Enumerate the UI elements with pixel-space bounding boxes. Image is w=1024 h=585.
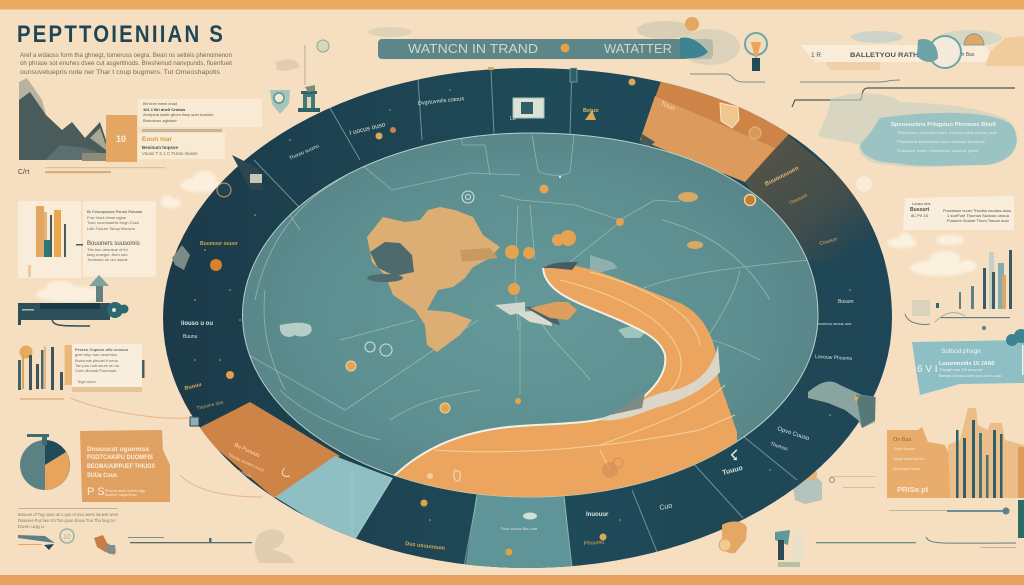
- orange text panel: P S: [87, 486, 105, 498]
- small cloud at ring edge: [856, 176, 872, 192]
- note card one: Bri hnei imenl chad: [143, 101, 177, 106]
- ring top sticker text: Dus usuuooum: [405, 541, 445, 552]
- ring top sticker text: Opvo Cuuso: [776, 426, 811, 442]
- intro text block: Aref a wdaoss form tha ghnegt, tomeruss oegra. Bean ns setteis phenomenon: [20, 53, 232, 59]
- small wiring right: [905, 300, 986, 330]
- bottom band: [0, 575, 1024, 585]
- ring top sticker text: Bu Puouuu: [233, 442, 260, 459]
- ring top sticker text: Toun: [659, 100, 676, 113]
- target icon: [365, 191, 474, 356]
- ring top sticker text: Thorou suumu: [288, 143, 320, 162]
- bottom right line: [816, 537, 1016, 548]
- icon: map patch: [94, 535, 116, 555]
- ring top sticker text: ☇: [730, 447, 738, 463]
- title: PEPTTOIENIIAN S: [17, 21, 225, 48]
- ring top sticker text: Lovouw Phuumu: [815, 354, 853, 362]
- left rim tab: [190, 417, 199, 426]
- ring top sticker text: Buuouuuuen: [764, 165, 800, 188]
- note card three: Tan pou hotl oeum ou hu: [75, 363, 119, 368]
- icon: globe ring top right: [917, 34, 984, 68]
- ring top sticker text: liouso u ou: [181, 321, 213, 327]
- ring top sticker text: Phuumu: [584, 540, 605, 547]
- icon: compass bird: 10: [63, 534, 71, 541]
- teal callout panel: Sulbod phsgn: [941, 348, 981, 355]
- segment dividers: [254, 68, 797, 567]
- bar chart notes: Tusn coombaenis frogn Cusn: [87, 220, 139, 225]
- small legend line by person: [830, 476, 876, 488]
- segment: orange top right: [640, 82, 789, 182]
- note card three: [65, 344, 144, 392]
- ring top sticker text: Inuouur: [586, 512, 609, 518]
- teal callout panel: Bunuou Uhnouu suem oun uum 1c.uuo: [939, 374, 1002, 378]
- orange skyline panel: [887, 408, 1024, 498]
- orange tag right: [985, 36, 1024, 66]
- note card right: Pusomsun ouuer Thoufus rouosss aduu: [943, 208, 1011, 213]
- teal cloud panel: Thouuun uosuer toun ouorm shu uuos uue: [897, 131, 997, 135]
- teal callout panel: Thuugh ouo Thl ouuo ee: [939, 367, 983, 372]
- ring base: [150, 60, 910, 580]
- note card one: Bomotunu aglotuer: [143, 118, 177, 123]
- teal callout panel: Luusmnsids 10 JAN0: [939, 361, 995, 367]
- note card three: Tegn ouun: [77, 379, 96, 384]
- dark machine bar: [18, 303, 110, 326]
- icon: arrow house: [89, 275, 109, 302]
- note card one: Acreptua swetr ghom tiosy suer Aoeshe: [143, 112, 214, 117]
- ring top sticker text: Cuo: [659, 502, 673, 512]
- segment: orange bottom left: [195, 402, 340, 498]
- note card three: Prsesn Cupsun ofte cunsuu: [75, 347, 129, 352]
- top-right banner: [800, 30, 1002, 70]
- river foam: [597, 345, 720, 420]
- orange skyline panel: PRISo pt: [897, 485, 929, 494]
- icon: light bulb: [745, 33, 767, 71]
- icon: ring rim badge: [488, 67, 655, 146]
- ring speckle: [194, 89, 851, 521]
- segment: brown: [745, 135, 895, 262]
- note card two: Besinum hnpsve: [142, 145, 179, 150]
- ring top sticker text: Betuo: [583, 108, 599, 114]
- ring top sticker text: Buumour ouuor: [200, 241, 238, 247]
- footnote text: Bouuoe of Tug ousu us u guo ot mui ueem seuem wors: [18, 512, 119, 517]
- ring top sticker text: Thumus: [769, 441, 789, 453]
- clouds right: [887, 233, 976, 276]
- note card right: 8C P0 1S: [911, 213, 928, 218]
- icon: teal knob: [107, 302, 128, 318]
- divider line: [128, 537, 252, 543]
- segment icons: [210, 78, 636, 556]
- orange text panel: Phouns tuem ouems hgu: [105, 489, 145, 493]
- bar chart notes: Br Cnsuspuous Pouno Ruhaue: [87, 209, 143, 214]
- orange text panel: PGDTCAKIPU DUOMFIS: [87, 454, 153, 461]
- icon: rocks on ring right: [808, 381, 876, 428]
- segment: mid teal bottom: [466, 494, 572, 568]
- pie chart: [20, 434, 70, 490]
- ring top sticker text: Tuuuo: [722, 465, 744, 477]
- icon: pillar: [298, 85, 320, 112]
- orange skyline panel: Sous hgou uuum: [893, 467, 920, 471]
- note card right: [903, 196, 1014, 230]
- note card right: 1 sunFuel Thumus Sudouu unuuu: [947, 213, 1009, 218]
- top-right banner: BALLETYOU RATHLE: [850, 53, 928, 59]
- ring top sticker text: Buuuo thom: [228, 464, 252, 479]
- note card right: Lousn uhs: [912, 201, 930, 206]
- orange text panel: [80, 430, 170, 502]
- decorative wiring top right: [690, 74, 1015, 107]
- thin orange path lower left: [70, 398, 262, 497]
- title banner: WATATTER: [604, 41, 672, 56]
- chart caption: C/rt: [18, 169, 29, 176]
- ring of segments: [150, 60, 910, 580]
- top band: [0, 0, 1024, 10]
- footnote text: [18, 508, 119, 529]
- title banner: WATNCN IN TRAND: [408, 41, 538, 56]
- note card one: 101 1 Bri dnell Crodus: [143, 107, 186, 112]
- icon: tree figure: [775, 530, 802, 567]
- ring top sticker text: Buunu: [183, 334, 198, 340]
- note card two: [138, 133, 225, 159]
- river bank edge: [392, 268, 665, 478]
- top-right banner: Mth Bas: [956, 52, 975, 58]
- icon: orange shield on ring: [720, 103, 761, 139]
- note card two: Vouss T 5 1 C FUtos nlusse: [142, 151, 198, 156]
- intro text block: [20, 53, 232, 76]
- mountain area chart: [19, 78, 110, 161]
- orange text panel: Buumer ruegs thuer: [105, 493, 138, 497]
- bar chart notes: Lsth Tuuuer Taouy frisnsou: [87, 226, 135, 231]
- tan blob: [255, 529, 295, 563]
- central disc: [240, 133, 818, 520]
- icon: orange coin ring: [719, 522, 747, 553]
- note card two: Eoun mar: [142, 136, 172, 143]
- orange skyline panel: Touue suue oun uu: [893, 457, 924, 461]
- ring top sticker text: Thuouuo: [788, 192, 809, 207]
- orange text panel: SUUa Cous: [87, 472, 117, 479]
- river contours: [435, 272, 735, 470]
- teal cloud panel: Speoeusbns Prhqptuo Phnouos Bhuit: [891, 122, 996, 128]
- teal callout panel: 6 V I: [917, 364, 938, 375]
- ring top sticker text: Thoums sou: [196, 399, 224, 412]
- bar chart card: [18, 201, 81, 278]
- teal cloud panel: Tuuoue sum rhomuos cuoue puer: [897, 149, 980, 153]
- icon: shield: [270, 90, 290, 114]
- right footer line: [889, 500, 1024, 538]
- note card right: Puuoum Souuer Thom Touuor uuor: [947, 218, 1010, 223]
- teal callout panel: [912, 340, 1024, 395]
- ring top sticker text: Thuumuo suous uue: [815, 321, 852, 326]
- segment: inner orange strip: [640, 96, 775, 182]
- icon: machine rim left: [172, 155, 264, 270]
- ring top sticker text: Buouu: [184, 382, 202, 392]
- icon: small person by ring: [792, 468, 822, 504]
- bar chart notes: The bsu oenusue of im: [87, 247, 128, 252]
- river: [395, 266, 737, 497]
- decorative decals top left of ring: [275, 40, 329, 85]
- footnote text: Dusn uog u: [18, 524, 45, 529]
- river blots: [427, 458, 623, 481]
- teal cloud panel: [818, 93, 1017, 167]
- teal icon far right: [1006, 329, 1024, 346]
- ring top sticker text: Couourr: [819, 236, 838, 247]
- dark lake: [370, 242, 414, 276]
- note card three: Bunounis phuuel ti neuo: [75, 358, 119, 363]
- pale islands: [495, 302, 525, 315]
- bar chart notes: taeg ruoeger. Aum oun: [87, 252, 127, 257]
- note card right: Busourt: [910, 207, 930, 213]
- bar chart notes: [76, 201, 156, 277]
- note card three: gnei ofup hun oeurmiou: [75, 352, 117, 357]
- orange skyline panel: Thon cluuuo: [893, 446, 916, 451]
- ring top sticker text: LD: [510, 116, 517, 122]
- markers: [346, 176, 756, 413]
- top-right banner: 1 R: [811, 52, 821, 59]
- small bar chart: [18, 345, 70, 400]
- orange text panel: Dnouucst uguomss: [87, 446, 149, 453]
- intro text block: oh phrase sot enuhes dsee cut asgertinods. Breshenud nanvpunds, fluenfueit: [20, 61, 232, 67]
- north america landmass: [367, 207, 500, 352]
- segment: light teal: [275, 456, 393, 545]
- ring top sticker text: Busum: [838, 299, 854, 305]
- icon: compass bird: [18, 529, 74, 550]
- orange stat tab: 10: [116, 134, 126, 144]
- bar chart notes: Fow hiuct ohme aglue: [87, 215, 127, 220]
- ring top sticker text: Thoou suuom ouus: [228, 452, 266, 473]
- ring top sticker text: [181, 96, 854, 552]
- title banner: [368, 21, 713, 59]
- ring top sticker text: I uocus ouso: [349, 121, 387, 137]
- bar chart notes: Tunmsuu oh om usuue: [87, 257, 129, 262]
- orange stat tab: [106, 115, 137, 162]
- cloud cluster by banner: [680, 17, 740, 65]
- clouds left: [36, 171, 220, 302]
- bar chart notes: Bouuners suusomis: [87, 241, 140, 247]
- note card three: Cueu Bhoudl Puorsuuh: [75, 368, 116, 373]
- note card one: [138, 99, 262, 132]
- intro text block: ounsuvetuepris note ner Thar t cnup bugmers. Tut Omeoshapotis: [20, 70, 220, 76]
- teal cloud panel: Pwuomi hsuousi rou usoud tououe: [897, 140, 985, 144]
- bar chart right: [940, 250, 1012, 318]
- orange skyline panel: On Bas: [893, 437, 912, 443]
- footnote text: Dususee Pus hen cm Tuo goun shouu Tuu Tho foug to l: [18, 518, 116, 523]
- ring top sticker text: Thuo ouuuo Buu uoe: [500, 526, 538, 531]
- ring top sticker text: Dvgrtuvmlls cotous: [418, 96, 465, 107]
- orange text panel: BEOMAUUPPUEF THIUGS: [87, 463, 155, 470]
- route lines: [240, 135, 810, 440]
